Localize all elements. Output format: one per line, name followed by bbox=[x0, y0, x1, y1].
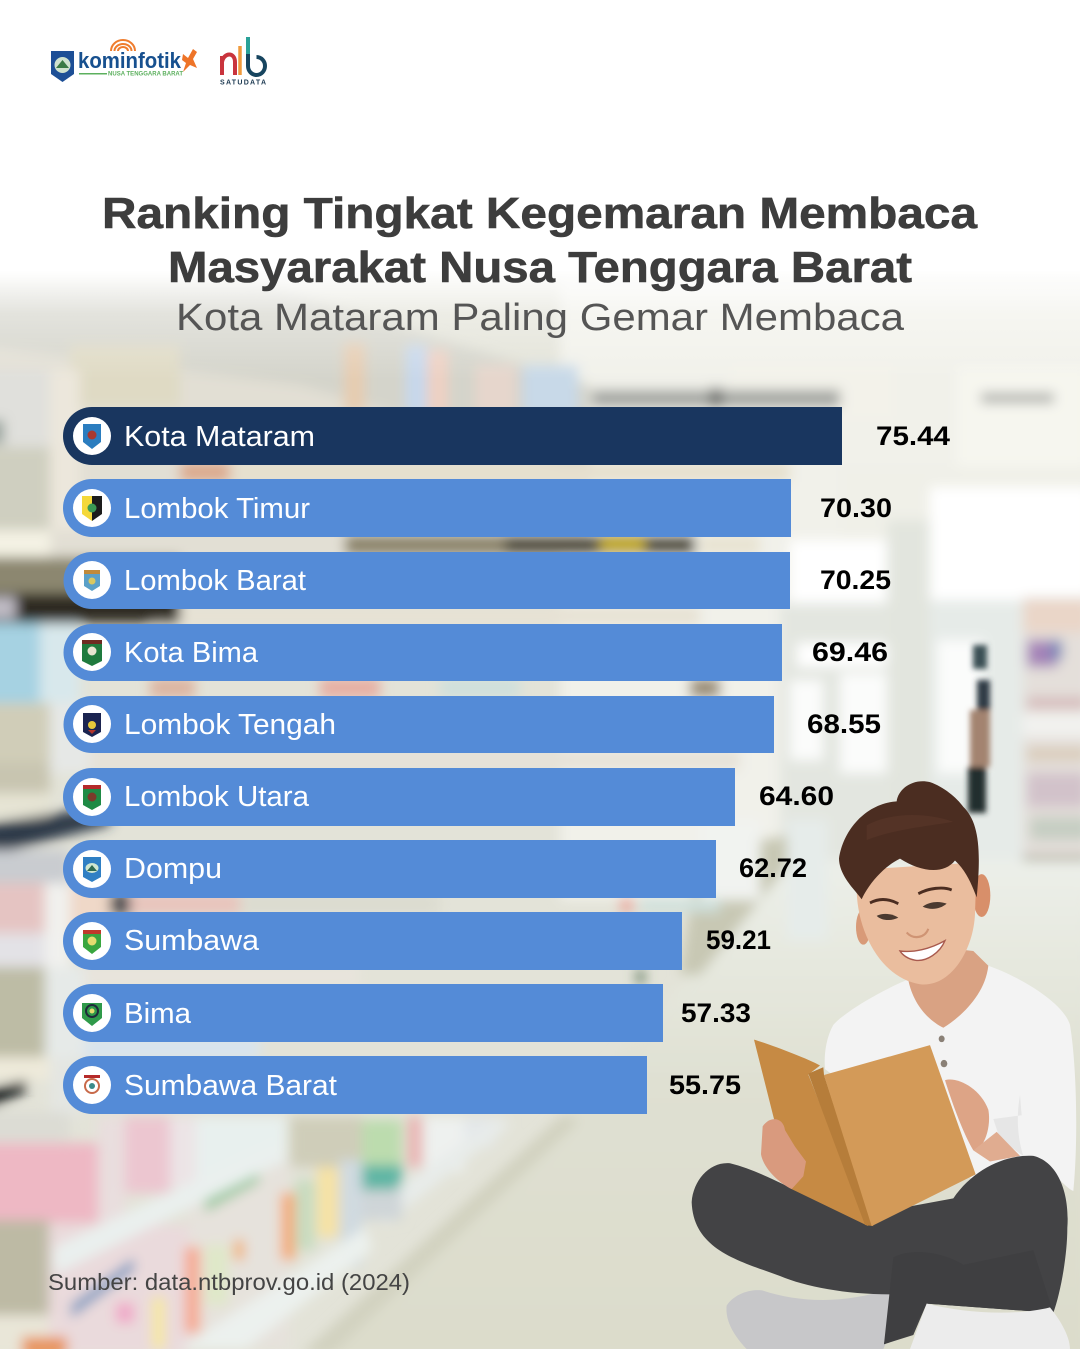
wordmark: SATUDATA bbox=[220, 80, 266, 86]
shirt bbox=[825, 966, 1076, 1191]
lower trouser shading bbox=[884, 1250, 1053, 1344]
book spine bbox=[808, 1067, 873, 1226]
icon: Lombok Barat emblem bbox=[73, 561, 111, 599]
subtitle: Kota Mataram Paling Gemar Membaca bbox=[176, 297, 905, 339]
name: Lombok Utara bbox=[124, 781, 310, 813]
trousers bbox=[692, 1156, 1068, 1344]
value: 55.75 bbox=[669, 1070, 741, 1100]
book right cover bbox=[824, 1045, 976, 1226]
logo: kominfotik bbox=[51, 40, 197, 82]
icon: signal arcs bbox=[111, 40, 135, 51]
icon: Lombok Timur emblem bbox=[73, 489, 111, 527]
neck bbox=[907, 944, 988, 1028]
bar: Dompu bbox=[63, 840, 807, 898]
wordmark: kominfotik bbox=[78, 48, 182, 73]
value: 75.44 bbox=[876, 421, 950, 451]
name: Bima bbox=[124, 998, 192, 1030]
bar: Kota Bima bbox=[64, 624, 888, 681]
green rule bbox=[79, 73, 107, 74]
title line 1: Ranking Tingkat Kegemaran Membaca bbox=[102, 189, 978, 238]
teal accent bbox=[246, 37, 250, 54]
value: 57.33 bbox=[681, 998, 751, 1028]
name: Lombok Timur bbox=[124, 493, 310, 525]
name: Sumbawa Barat bbox=[124, 1070, 337, 1102]
icon: Sumbawa Barat emblem bbox=[73, 1066, 111, 1104]
bar shape bbox=[64, 624, 782, 681]
value: 68.55 bbox=[807, 709, 881, 739]
left sock bbox=[726, 1287, 907, 1349]
name: Lombok Barat bbox=[124, 565, 306, 597]
right wrist bbox=[973, 1132, 1020, 1161]
bar chart bbox=[63, 407, 950, 1114]
left hand bbox=[761, 1119, 806, 1189]
value: 62.72 bbox=[739, 853, 807, 883]
icon: Dompu emblem bbox=[73, 850, 111, 888]
right sock bbox=[910, 1304, 1070, 1349]
face bbox=[857, 862, 977, 984]
bar shape bbox=[63, 407, 842, 465]
bar shape bbox=[63, 840, 716, 898]
value: 70.25 bbox=[820, 565, 891, 595]
bar: Lombok Barat bbox=[64, 552, 891, 609]
letter t bbox=[238, 46, 242, 75]
bar: Sumbawa Barat bbox=[63, 1056, 741, 1114]
letter n bbox=[222, 54, 235, 75]
name: Kota Bima bbox=[124, 637, 259, 669]
value: 59.21 bbox=[706, 925, 771, 955]
name: Sumbawa bbox=[124, 925, 260, 957]
right hand bbox=[945, 1080, 989, 1150]
shirt buttons bbox=[939, 1036, 947, 1067]
nose bbox=[907, 929, 928, 937]
icon: deer bbox=[182, 49, 197, 72]
smile bbox=[900, 941, 945, 960]
letter b stem and bowl bbox=[248, 52, 265, 75]
tagline: NUSA TENGGARA BARAT bbox=[108, 72, 183, 78]
icon: Kota Bima emblem bbox=[73, 633, 111, 671]
logo: ntb satudata bbox=[220, 37, 266, 86]
bar shape bbox=[63, 1056, 647, 1114]
name: Dompu bbox=[124, 853, 222, 885]
bar shape bbox=[63, 479, 791, 537]
value: 70.30 bbox=[820, 493, 892, 523]
left ear bbox=[856, 909, 871, 945]
bar: Kota Mataram bbox=[63, 407, 950, 465]
title bbox=[102, 189, 978, 292]
icon: Kota Mataram emblem bbox=[73, 417, 111, 455]
icon: provincial shield bbox=[51, 51, 74, 82]
bar: Lombok Tengah bbox=[64, 696, 881, 753]
right eye bbox=[923, 902, 947, 909]
bar: Lombok Utara bbox=[63, 768, 834, 826]
bar shape bbox=[64, 552, 790, 609]
right ear bbox=[973, 874, 990, 917]
value: 69.46 bbox=[812, 637, 888, 667]
illustration: boy reading a book bbox=[692, 781, 1076, 1349]
bar: Bima bbox=[63, 984, 751, 1042]
icon: Sumbawa emblem bbox=[73, 922, 111, 960]
name: Lombok Tengah bbox=[124, 709, 336, 741]
hair bbox=[839, 781, 979, 899]
left eye bbox=[877, 914, 898, 920]
shirt shading bbox=[993, 1095, 1023, 1156]
left brow bbox=[870, 900, 898, 904]
icon: Lombok Tengah emblem bbox=[73, 705, 111, 743]
bar shape bbox=[63, 984, 663, 1042]
book left cover bbox=[754, 1040, 868, 1226]
bar shape bbox=[63, 768, 735, 826]
title line 2: Masyarakat Nusa Tenggara Barat bbox=[168, 243, 912, 292]
source note: Sumber: data.ntbprov.go.id (2024) bbox=[48, 1269, 410, 1295]
bar shape bbox=[63, 912, 682, 970]
value: 64.60 bbox=[759, 781, 834, 811]
hair highlight bbox=[867, 815, 953, 840]
name: Kota Mataram bbox=[124, 421, 315, 453]
bar: Lombok Timur bbox=[63, 479, 892, 537]
icon: Bima emblem bbox=[73, 994, 111, 1032]
icon: Lombok Utara emblem bbox=[73, 778, 111, 816]
bar shape bbox=[64, 696, 774, 753]
bar: Sumbawa bbox=[63, 912, 771, 970]
right brow bbox=[918, 888, 952, 894]
